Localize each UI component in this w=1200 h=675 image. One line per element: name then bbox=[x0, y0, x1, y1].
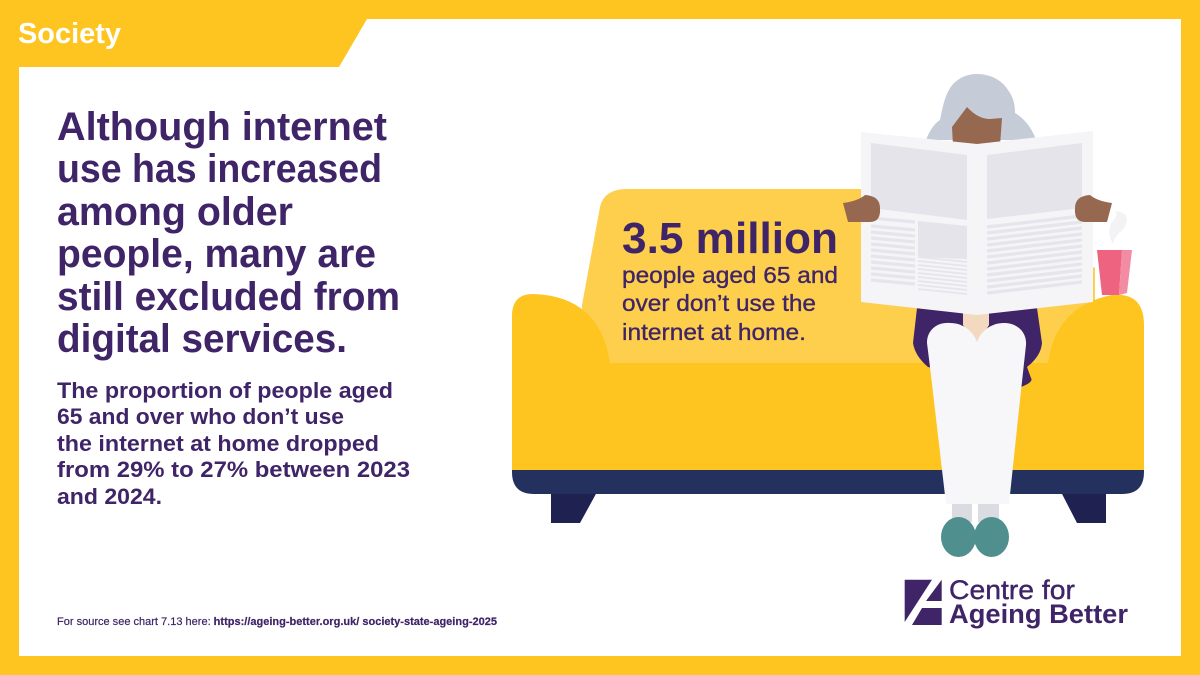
callout: 3.5 million: 3.5 million bbox=[622, 214, 838, 263]
supporting text: 65 and over who don’t use bbox=[57, 404, 344, 429]
sofa legs bbox=[551, 492, 1106, 523]
slippers bbox=[941, 517, 1009, 557]
main heading: people, many are bbox=[57, 232, 376, 276]
callout: 3.5 million: internet at home. bbox=[622, 319, 806, 345]
hair bbox=[926, 74, 1036, 140]
logo wordmark: Centre for bbox=[949, 575, 1075, 605]
torso bbox=[913, 308, 1042, 387]
supporting text: from 29% to 27% between 2023 bbox=[57, 457, 410, 482]
sofa back cushion bbox=[582, 189, 1095, 363]
newspaper bbox=[861, 131, 1093, 315]
main heading bbox=[57, 105, 400, 361]
main heading: digital services. bbox=[57, 317, 347, 361]
chest bbox=[963, 308, 989, 345]
callout: 3.5 million: over don’t use the bbox=[622, 290, 816, 316]
main heading: still excluded from bbox=[57, 275, 400, 319]
sofa bbox=[512, 189, 1144, 523]
callout: 3.5 million: people aged 65 and bbox=[622, 262, 838, 288]
supporting text: the internet at home dropped bbox=[57, 431, 379, 456]
callout: 3.5 million bbox=[622, 214, 838, 345]
logo: Centre for Ageing Better bbox=[905, 575, 1128, 629]
main heading: Although internet bbox=[57, 105, 387, 149]
main heading: among older bbox=[57, 190, 293, 234]
sofa seat and arms bbox=[512, 294, 1144, 470]
supporting text: and 2024. bbox=[57, 484, 162, 509]
logo: Centre for Ageing Better: Ageing Better bbox=[949, 599, 1128, 629]
person reading newspaper bbox=[843, 74, 1112, 557]
logo mark bbox=[905, 580, 942, 625]
main heading: use has increased bbox=[57, 147, 382, 191]
icon: cup bbox=[1097, 250, 1132, 295]
trousers bbox=[927, 323, 1026, 504]
face bbox=[952, 107, 1002, 146]
icon: steam bbox=[1109, 211, 1127, 244]
hands bbox=[843, 195, 1112, 222]
newspaper text lines bbox=[871, 216, 1082, 293]
supporting text: The proportion of people aged bbox=[57, 378, 393, 403]
socks bbox=[952, 504, 999, 522]
sofa base bbox=[512, 470, 1144, 494]
tab label: Society: Society bbox=[18, 18, 121, 50]
supporting text bbox=[57, 378, 410, 509]
source note: For source see chart 7.13 here: https://ageing-better.org.uk/ society-state-ageing-2025 bbox=[57, 616, 497, 628]
